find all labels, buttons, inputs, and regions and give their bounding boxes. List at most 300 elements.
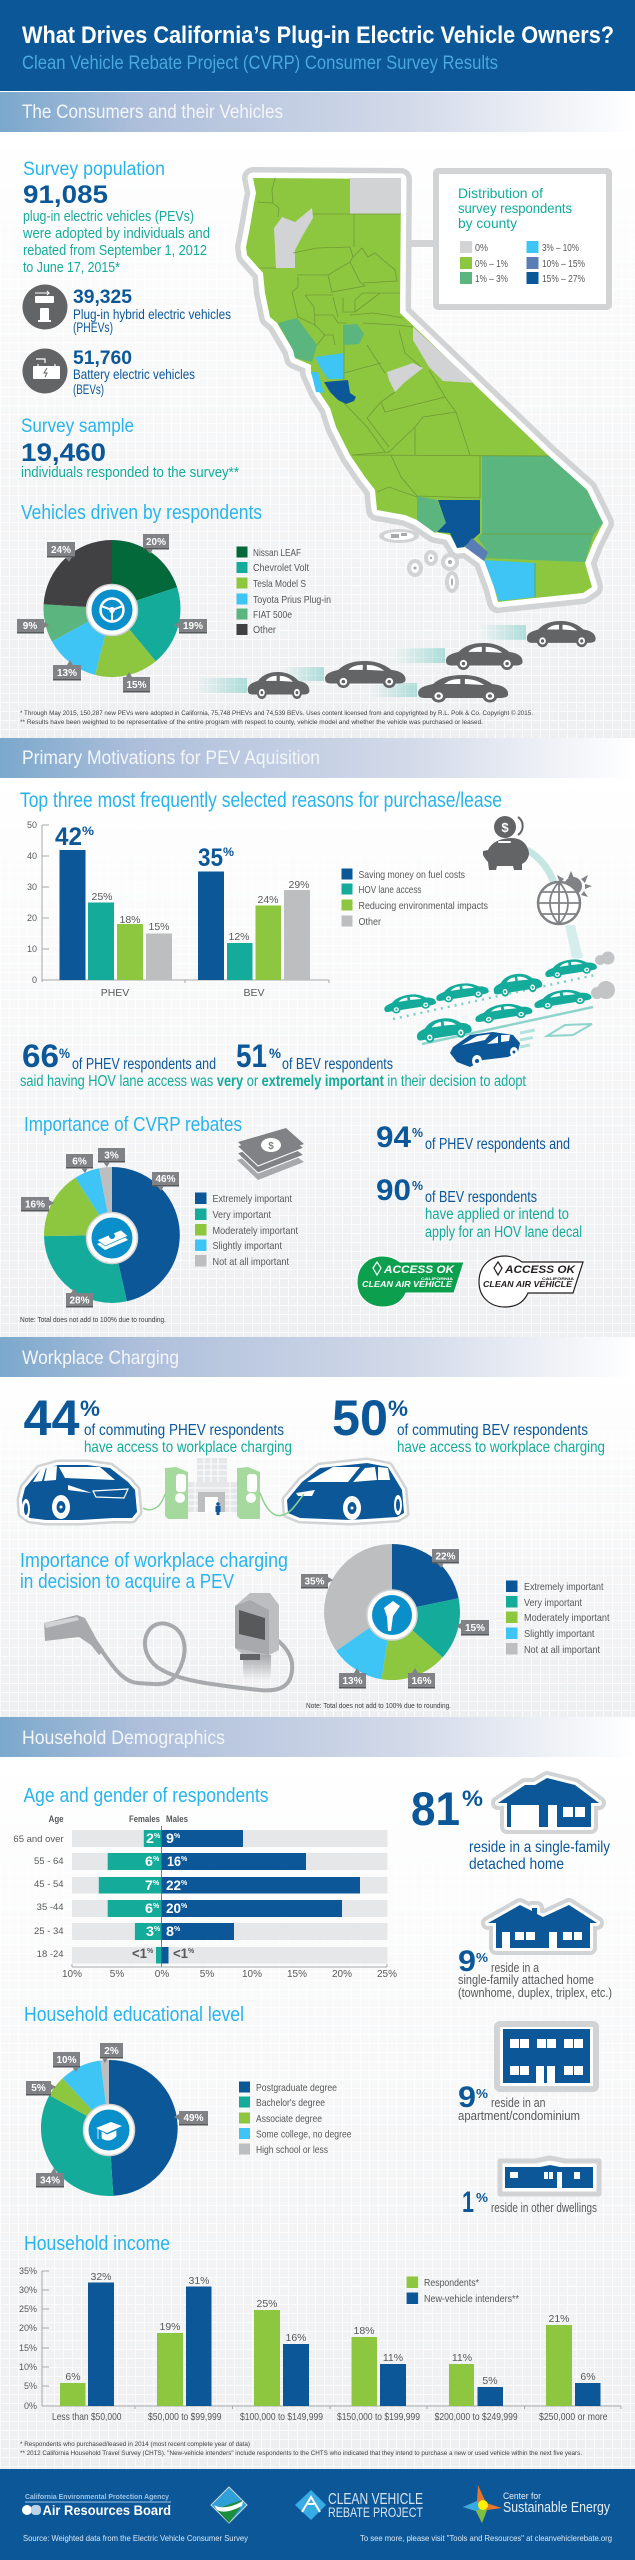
illustration: charging station and cable (44, 1593, 292, 1690)
stat: HOV lane importance: % (59, 1045, 70, 1061)
bars (60, 850, 310, 980)
footnotes: household income: * Respondents who purchased/leased in 2014 (most recent complete year of data) (20, 2441, 250, 2448)
value tags: 15% (465, 1623, 485, 1634)
heading: importance of workplace charging (20, 1549, 288, 1593)
value labels: 11% (452, 2352, 472, 2364)
bar chart: household income (19, 2266, 621, 2423)
stat: apartment: apartment/condominium (458, 2108, 580, 2123)
bar chart: age and gender: % (188, 1948, 195, 1955)
icon: graduation cap (84, 2104, 134, 2156)
axis (27, 820, 329, 985)
axis: 50 (27, 820, 37, 830)
value labels: 16% (285, 2332, 307, 2344)
value labels: 6% (65, 2371, 81, 2383)
stat: HOV decal: of PHEV respondents and (425, 1136, 570, 1153)
percent axis: 10% (242, 1969, 262, 1980)
age labels: 65 and over (13, 1834, 64, 1845)
number: 39,325 PHEVs (73, 287, 231, 335)
value labels: % (181, 1903, 188, 1910)
logo: air resources board: Air Resources Board (42, 2502, 171, 2518)
logo: clean vehicle rebate project: REBATE PROJECT (328, 2504, 423, 2520)
number: 39,325 PHEVs: 39,325 (73, 287, 132, 308)
stat: apartment: reside in an (491, 2095, 546, 2110)
icon: steering wheel (86, 584, 138, 636)
legend swatches: 0% – 1% (475, 259, 508, 270)
row backgrounds (72, 1830, 388, 1964)
axis: 10 (27, 944, 37, 954)
value labels: 31% (188, 2275, 210, 2287)
number: 91,085: 91,085 (23, 181, 108, 209)
legend: distribution by county (411, 171, 609, 307)
logo: center for sustainable energy: Center for (503, 2491, 541, 2502)
value labels: BEV (243, 987, 265, 999)
value tags: 19% (183, 621, 203, 632)
number: 39,325 PHEVs: (PHEVs) (73, 319, 113, 335)
axis headers (49, 1814, 188, 1824)
footnotes: section one (20, 709, 533, 726)
footnotes: household income: ** 2012 California Household Travel Survey (CHTS). "New-vehicle intenders" include respondents to the CHTS who indicated that they intend to purchase a new or used vehicle within the next five years. (20, 2450, 582, 2457)
number: 51,760 BEVs (73, 348, 195, 397)
value labels: 11% (383, 2352, 403, 2364)
value labels: % (153, 1856, 160, 1863)
legend: education (239, 2082, 352, 2156)
stat: other dwellings: reside in other dwellings (491, 2200, 597, 2215)
value tags: 24% (51, 545, 71, 556)
legend: household income: New-vehicle intenders** (424, 2293, 519, 2305)
axis headers: Males (166, 1814, 188, 1824)
category labels: $150,000 to $199,999 (337, 2411, 420, 2423)
legend swatches: 3% – 10% (542, 243, 579, 254)
legend: education: Postgraduate degree (256, 2082, 337, 2094)
logo: state seal (211, 2487, 247, 2523)
category labels: Less than $50,000 (52, 2411, 122, 2423)
stat: other dwellings: % (476, 2190, 488, 2205)
axis: 0 (32, 975, 37, 985)
female bars (99, 1830, 162, 1964)
stat: PHEV workplace charging: of commuting PHEV respondents (84, 1422, 284, 1439)
section heading: household demographics: Household Demographics (22, 1728, 225, 1749)
footnotes: section one: * Through May 2015, 150,287 new PEVs were adopted in California, 75,748 PHEVs and 74,539 BEVs. Uses content licensed from and copyrighted by R.L. Polk & Co. Copyright © 2015. (20, 709, 533, 717)
value tags: 9% (23, 621, 37, 632)
illustration: HOV lane cars (383, 952, 615, 1067)
icon: cash stack: $ (268, 1141, 274, 1152)
percent axis: 15% (287, 1969, 307, 1980)
value labels: % (174, 1926, 181, 1933)
value labels: PHEV (101, 987, 129, 999)
panel: survey sample: Survey sample (21, 416, 134, 437)
value tags: 6% (72, 1156, 87, 1168)
stat: HOV decal: % (412, 1125, 423, 1140)
value tags: 22% (435, 1552, 456, 1562)
value labels (55, 823, 310, 999)
value labels: 6% (580, 2371, 596, 2383)
bar chart: age and gender (13, 1814, 397, 1980)
value labels: 3 (146, 1923, 154, 1939)
legend title: Distribution of (458, 185, 543, 201)
stat: other dwellings: 1 (462, 2186, 474, 2219)
stat: BEV workplace charging: 50 (332, 1390, 388, 1446)
stat: single-family attached: 9 (458, 1945, 476, 1978)
legend: vehicles: Other (253, 624, 276, 636)
value labels: 22 (166, 1877, 181, 1893)
age labels: 35 -44 (37, 1902, 64, 1913)
legend: vehicles: FIAT 500e (253, 609, 292, 621)
heading: importance of workplace charging: in decision to acquire a PEV (20, 1570, 234, 1593)
legend: household income (407, 2276, 519, 2305)
category labels: $100,000 to $149,999 (240, 2411, 323, 2423)
stat: HOV lane importance: of PHEV respondents and (72, 1056, 216, 1073)
percent axis: 20% (332, 1969, 352, 1980)
stat: single-family attached: reside in a (491, 1960, 540, 1975)
value tags: 3% (104, 1150, 119, 1162)
legend: CVRP rebates: Extremely important (212, 1193, 292, 1205)
value labels: 16 (167, 1853, 181, 1869)
number: 51,760 BEVs: 51,760 (73, 348, 132, 369)
icon: plug in circle (367, 1590, 417, 1640)
heading: age and gender: Age and gender of respondents (24, 1785, 268, 1807)
section heading: consumers (0, 92, 635, 132)
value tags: 13% (57, 668, 77, 679)
icon: battery electric (22, 348, 68, 394)
value labels: % (82, 824, 94, 838)
logo: air resources board (22, 2492, 171, 2518)
legend: workplace charging: Very important (524, 1597, 582, 1609)
legend: workplace charging: Moderately important (524, 1612, 610, 1624)
decal: green access ok: CALIFORNIA (421, 1277, 454, 1281)
panel: survey sample: 19,460 (21, 439, 106, 467)
decal: green access ok: CLEAN AIR VEHICLE (362, 1279, 452, 1289)
category labels: $50,000 to $99,999 (148, 2411, 222, 2423)
age labels: 55 - 64 (34, 1856, 64, 1867)
value tags: 16% (25, 1200, 45, 1210)
value tags: 49% (183, 2113, 204, 2124)
bar chart: age and gender: <1 (132, 1945, 147, 1961)
legend swatches (460, 241, 585, 285)
value labels (145, 1830, 188, 1939)
stat: single-family detached: 81 (411, 1782, 460, 1835)
axis: 5% (24, 2381, 37, 2391)
icon: BEV front view (260, 1463, 404, 1520)
value labels: 6 (145, 1853, 153, 1869)
stat: single-family attached (458, 1905, 612, 2000)
text: adoption description: were adopted by individuals and (22, 225, 210, 242)
value labels: 24% (257, 894, 279, 906)
axis (19, 2266, 621, 2411)
value labels: % (153, 1903, 160, 1910)
icon: mobile home (500, 2158, 599, 2194)
axis: 40 (27, 851, 37, 861)
decal: green access ok (357, 1256, 464, 1307)
icon: attached houses (488, 1905, 597, 1948)
panel: survey sample: individuals responded to the survey** (21, 465, 239, 481)
stat: HOV decal: % (412, 1178, 423, 1193)
map: california counties (246, 178, 603, 602)
header banner (0, 0, 635, 91)
icon: channel islands (379, 529, 459, 593)
legend: workplace charging: Slightly important (524, 1628, 595, 1640)
stat: PHEV workplace charging: have access to workplace charging (84, 1439, 292, 1456)
decal: white access ok: CALIFORNIA (542, 1277, 575, 1281)
number: 51,760 BEVs: (BEVs) (73, 381, 104, 397)
logo: air resources board: California Environmental Protection Agency (25, 2492, 170, 2501)
age labels (13, 1834, 64, 1960)
heading: importance of workplace charging: Importance of workplace charging (20, 1549, 288, 1572)
axis: 10% (19, 2362, 37, 2372)
value labels: % (153, 1880, 160, 1887)
footnotes: household income (20, 2441, 582, 2457)
green bars: respondents (60, 2310, 572, 2406)
legend title (458, 185, 572, 231)
axis: 30% (19, 2285, 37, 2295)
legend: vehicles: Chevrolet Volt (253, 562, 309, 574)
icon: plug-in hybrid (22, 284, 68, 330)
legend title: by county (458, 215, 517, 231)
stat: HOV decal: apply for an HOV lane decal (425, 1224, 582, 1241)
legend: education: High school or less (256, 2144, 328, 2156)
icon: piggy bank and globe: $ (501, 820, 509, 835)
decal: white access ok: CLEAN AIR VEHICLE (483, 1279, 572, 1289)
section heading: workplace charging (0, 1337, 635, 1377)
category labels (52, 2411, 608, 2423)
stat: BEV workplace charging: % (388, 1396, 408, 1421)
axis: 20 (27, 913, 37, 923)
decal: white access ok (479, 1256, 583, 1307)
legend: motivations: Other (358, 916, 381, 928)
icon: detached house (498, 1778, 599, 1827)
value tags (301, 1549, 489, 1688)
stat: HOV decal: 94 (376, 1121, 411, 1154)
legend: CVRP rebates (195, 1192, 298, 1268)
stat: HOV decal: 90 (376, 1174, 411, 1207)
stat: apartment: 9 (458, 2081, 476, 2114)
legend: motivations: Reducing environmental impacts (358, 900, 488, 912)
value labels: 32% (90, 2271, 112, 2283)
legend: CVRP rebates: Very important (212, 1209, 271, 1221)
stat: apartment: % (476, 2086, 488, 2101)
stat: other dwellings (462, 2158, 599, 2219)
heading: household income: Household income (24, 2233, 170, 2255)
age labels: 25 - 34 (34, 1926, 64, 1937)
value tags: 13% (342, 1676, 363, 1687)
axis: 30 (27, 882, 37, 892)
legend: workplace charging: Not at all important (524, 1644, 600, 1656)
logo: center for sustainable energy (463, 2485, 610, 2523)
value labels: 5% (482, 2375, 498, 2387)
value tags (21, 1148, 179, 1308)
value labels: 18% (353, 2325, 375, 2337)
source line: Source: Weighted data from the Electric Vehicle Consumer Survey (23, 2533, 249, 2543)
value labels: 6 (145, 1900, 153, 1916)
legend swatches: 1% – 3% (475, 274, 508, 285)
axis: 25% (19, 2304, 37, 2314)
decal: green access ok: ACCESS OK (383, 1264, 455, 1276)
logo: clean vehicle rebate project (295, 2490, 423, 2520)
legend: education: Bachelor's degree (256, 2097, 325, 2109)
stat: HOV decal: of BEV respondents (425, 1189, 537, 1206)
stat: apartment (458, 2024, 596, 2123)
stat: PHEV workplace charging: 44 (24, 1390, 80, 1446)
value labels: 15% (148, 921, 170, 933)
section heading: household demographics (0, 1717, 635, 1757)
pie chart: education (26, 2043, 208, 2196)
value tags: 5% (31, 2083, 46, 2094)
legend title: survey respondents (458, 200, 572, 216)
value tags: 34% (40, 2176, 60, 2186)
stat: HOV lane importance: said having HOV lane access was very or extremely important in their decision to adopt (20, 1073, 527, 1090)
male bars (162, 1830, 360, 1964)
icon: money in circle (86, 1212, 138, 1264)
stat: PHEV workplace charging (24, 1390, 292, 1456)
percent axis: 0% (155, 1969, 169, 1980)
value labels: 42 (55, 823, 82, 851)
value labels: 8 (166, 1923, 174, 1939)
age labels: 18 -24 (37, 1949, 64, 1960)
value tags: 35% (304, 1576, 325, 1588)
value tags: 2% (104, 2046, 119, 2057)
category labels: $200,000 to $249,999 (435, 2411, 518, 2423)
panel: survey population (22, 159, 231, 397)
legend: household income: Respondents* (424, 2277, 479, 2289)
value labels: % (174, 1833, 181, 1840)
icon: cash stack (237, 1128, 304, 1180)
value labels: 20 (166, 1900, 181, 1916)
percent axis: 5% (200, 1969, 214, 1980)
value labels: % (154, 1926, 161, 1933)
value tags (26, 2043, 208, 2188)
value labels: 35 (198, 844, 223, 872)
value labels: 25% (256, 2298, 278, 2310)
stat: PHEV workplace charging: % (80, 1396, 100, 1421)
axis: 35% (19, 2266, 37, 2276)
text: adoption description: to June 17, 2015* (23, 259, 120, 276)
value labels: 19% (159, 2321, 181, 2333)
stat: HOV lane importance: of BEV respondents (282, 1056, 393, 1073)
note: rounding: Note: Total does not add to 100% due to rounding. (20, 1317, 166, 1324)
value tags: 15% (126, 680, 147, 691)
stat: HOV lane importance: 51 (236, 1038, 267, 1074)
legend: vehicles: Toyota Prius Plug-in (253, 594, 331, 606)
number: 39,325 PHEVs: Plug-in hybrid electric vehicles (73, 306, 231, 322)
legend: workplace charging (506, 1580, 610, 1656)
bar chart: age and gender: <1 (173, 1945, 188, 1961)
heading: importance of CVRP rebates: Importance of CVRP rebates (24, 1114, 242, 1136)
value labels: 21% (548, 2313, 570, 2325)
heading: household educational level: Household educational level (24, 2004, 244, 2026)
bar chart: motivations (27, 820, 329, 999)
legend: CVRP rebates: Not at all important (212, 1256, 289, 1268)
stat: single-family detached: reside in a single-family (469, 1839, 610, 1856)
stat: HOV decal (376, 1121, 582, 1241)
legend: education: Some college, no degree (256, 2128, 352, 2140)
legend: motivations (342, 868, 488, 928)
value tags: 46% (155, 1174, 176, 1185)
icon: blue car in HOV lane (450, 1032, 520, 1067)
value tags: 20% (146, 537, 166, 548)
percent axis: 5% (110, 1969, 124, 1980)
value tags: 28% (69, 1296, 90, 1306)
pie chart: CVRP rebates (21, 1148, 180, 1308)
heading: top three reasons: Top three most frequently selected reasons for purchase/lease (20, 789, 502, 812)
stat: single-family detached: detached home (469, 1856, 564, 1873)
age labels: 45 - 54 (34, 1879, 64, 1890)
axis: 0% (24, 2401, 37, 2411)
value tags: 16% (411, 1676, 432, 1687)
stat: single-family attached: single-family attached home (458, 1972, 594, 1987)
percent axis (62, 1964, 397, 1980)
heading: vehicles driven: Vehicles driven by respondents (21, 502, 262, 524)
bar chart: age and gender: % (147, 1948, 154, 1955)
legend: education: Associate degree (256, 2113, 322, 2125)
value labels: % (154, 1833, 161, 1840)
section heading: workplace charging: Workplace Charging (22, 1348, 179, 1369)
pie chart: vehicles driven (17, 534, 207, 692)
icon: PHEV front view (22, 1465, 137, 1520)
number: 51,760 BEVs: Battery electric vehicles (73, 366, 195, 382)
logo: clean vehicle rebate project: CLEAN VEHICLE (328, 2491, 423, 2508)
percent axis: 25% (377, 1969, 397, 1980)
logo: center for sustainable energy: Sustainable Energy (503, 2499, 610, 2516)
legend: CVRP rebates: Moderately important (212, 1225, 298, 1237)
footnotes: section one: ** Results have been weighted to be representative of the entire program with respect to county, vehicle model and whether the vehicle was purchased or leased. (20, 719, 483, 726)
stat: single-family attached: % (476, 1950, 488, 1965)
value labels: 18% (119, 914, 141, 926)
text: adoption description: rebated from September 1, 2012 (23, 242, 207, 259)
value labels: % (223, 845, 234, 859)
value labels: 25% (91, 891, 113, 903)
axis headers: Females (129, 1814, 160, 1824)
stat: BEV workplace charging (332, 1390, 605, 1456)
axis: 15% (19, 2343, 37, 2353)
value labels: 29% (288, 879, 310, 891)
subtitle: Clean Vehicle Rebate Project (CVRP) Consumer Survey Results (22, 53, 498, 74)
blue bars: new-vehicle intenders (88, 2282, 600, 2406)
legend: vehicles: Tesla Model S (253, 578, 306, 590)
value labels: % (181, 1856, 188, 1863)
panel: survey sample (21, 416, 239, 481)
stat: single-family detached (411, 1778, 610, 1873)
decal: white access ok: ACCESS OK (504, 1264, 576, 1276)
stat: single-family detached: % (462, 1786, 483, 1811)
legend: vehicles (236, 546, 331, 636)
value labels: 9 (166, 1830, 174, 1846)
text: adoption description (22, 208, 210, 276)
value labels: 12% (228, 931, 250, 943)
stat: HOV lane importance: 66 (22, 1038, 59, 1074)
stat: HOV lane importance (20, 1038, 527, 1090)
legend: motivations: Saving money on fuel costs (358, 869, 465, 881)
legend: workplace charging: Extremely important (524, 1581, 604, 1593)
value tags (17, 534, 207, 692)
stat: HOV decal: have applied or intend to (425, 1206, 569, 1223)
value tags: 10% (56, 2055, 77, 2066)
illustration: grey cars with trails (196, 621, 596, 702)
section heading: motivations: Primary Motivations for PEV Aquisition (22, 748, 320, 769)
legend swatches: 0% (475, 243, 488, 254)
value labels: 7 (145, 1877, 153, 1893)
value labels: 2 (146, 1830, 154, 1846)
legend: CVRP rebates: Slightly important (212, 1240, 282, 1252)
heading: survey population: Survey population (23, 159, 165, 180)
section heading: consumers: The Consumers and their Vehicles (22, 102, 283, 123)
section heading: motivations (0, 738, 635, 778)
axis: 20% (19, 2323, 37, 2333)
illustration: workplace building and chargers (143, 1458, 260, 1519)
legend swatches: 15% – 27% (542, 274, 585, 285)
percent axis: 10% (62, 1969, 82, 1980)
value labels (65, 2271, 596, 2387)
stat: BEV workplace charging: of commuting BEV respondents (397, 1422, 588, 1439)
legend: vehicles: Nissan LEAF (253, 547, 301, 559)
